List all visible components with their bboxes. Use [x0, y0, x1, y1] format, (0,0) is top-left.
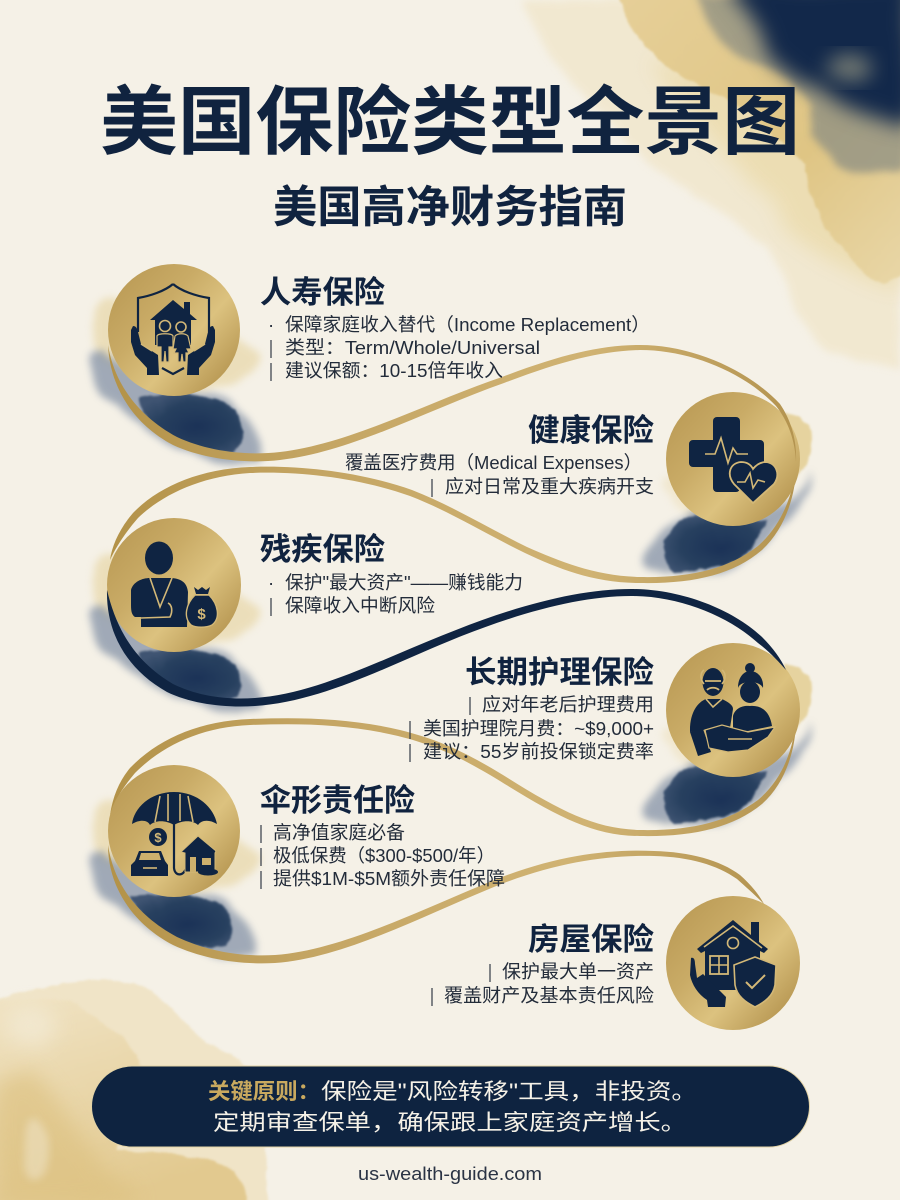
circle: home insurance — [666, 896, 800, 1030]
subtitle: 美国高净财务指南 — [273, 183, 627, 232]
callout text: 定期审查保单，确保跟上家庭资产增长。 — [213, 1110, 687, 1135]
heading: 房屋保险 — [528, 922, 654, 957]
section: home insurance — [432, 922, 655, 1006]
body text: 极低保费（$300-$500/年） — [273, 845, 495, 866]
ribbon: long-term care to umbrella — [110, 715, 796, 836]
body text — [345, 452, 654, 497]
body text: 覆盖财产及基本责任风险 — [444, 985, 655, 1006]
body text: 应对年老后护理费用 — [482, 694, 654, 715]
body text — [432, 961, 655, 1006]
icon: elderly couple in hand — [690, 663, 775, 756]
circle: health insurance — [666, 392, 800, 526]
callout text — [213, 1079, 697, 1135]
body text — [261, 822, 505, 889]
body text: 建议保额：10-15倍年收入 — [285, 360, 503, 381]
circle: long-term care insurance — [666, 643, 800, 777]
body text — [410, 694, 654, 762]
circle: umbrella insurance — [108, 765, 240, 897]
icon: medical cross with heart — [689, 417, 777, 503]
body text: 保障收入中断风险 — [285, 595, 435, 616]
ribbon: disability to long-term care (navy) — [107, 589, 786, 706]
footer url: us-wealth-guide.com — [358, 1164, 542, 1184]
heading: 长期护理保险 — [465, 655, 654, 690]
section: umbrella insurance — [260, 783, 505, 889]
watercolor: bottom left — [0, 980, 268, 1200]
icon: umbrella, car and house: $ — [154, 830, 162, 845]
section: health insurance — [345, 413, 654, 497]
ribbon: health to disability — [110, 462, 796, 583]
body text: 美国护理院月费：~$9,000+ — [423, 718, 654, 739]
body text: 保护"最大资产"——赚钱能力 — [285, 572, 523, 593]
callout text: 保险是"风险转移"工具，非投资。 — [321, 1079, 697, 1104]
body text: 保障家庭收入替代（Income Replacement） — [285, 314, 650, 335]
section: life insurance — [260, 275, 650, 381]
body text: 建议：55岁前投保锁定费率 — [423, 741, 654, 762]
callout: key principle — [92, 1066, 810, 1147]
body text: 类型：Term/Whole/Universal — [285, 337, 540, 358]
icon: umbrella, car and house — [131, 788, 218, 876]
body text — [268, 572, 523, 616]
watercolor blobs behind circles — [92, 298, 812, 957]
body text: 覆盖医疗费用（Medical Expenses） — [345, 452, 642, 473]
body text: 保护最大单一资产 — [502, 961, 654, 982]
heading: 伞形责任险 — [260, 783, 415, 818]
heading: 健康保险 — [528, 413, 654, 448]
circle: life insurance — [108, 264, 240, 396]
body text — [268, 314, 650, 381]
icon: injured person with money bag — [131, 542, 217, 627]
watercolor: top right — [520, 0, 900, 370]
ribbon: umbrella to home — [108, 845, 764, 963]
section: disability insurance — [260, 532, 523, 616]
body text: 高净值家庭必备 — [273, 822, 405, 843]
callout label: 关键原则： — [208, 1079, 320, 1104]
title: 美国保险类型全景图 — [100, 80, 800, 164]
icon: house, hand and shield — [690, 920, 776, 1007]
body text: 提供$1M-$5M额外责任保障 — [273, 868, 505, 889]
ribbon: life to health — [108, 345, 796, 462]
body text: 应对日常及重大疾病开支 — [445, 476, 654, 497]
heading: 残疾保险 — [260, 532, 385, 567]
body text: · — [268, 314, 274, 335]
heading: 人寿保险 — [260, 275, 385, 310]
body text: · — [268, 572, 274, 593]
icon: family shield and hands — [131, 284, 215, 375]
section: long-term care insurance — [410, 655, 654, 762]
icon: injured person with money bag: $ — [197, 606, 206, 623]
circle: disability insurance — [107, 518, 241, 652]
